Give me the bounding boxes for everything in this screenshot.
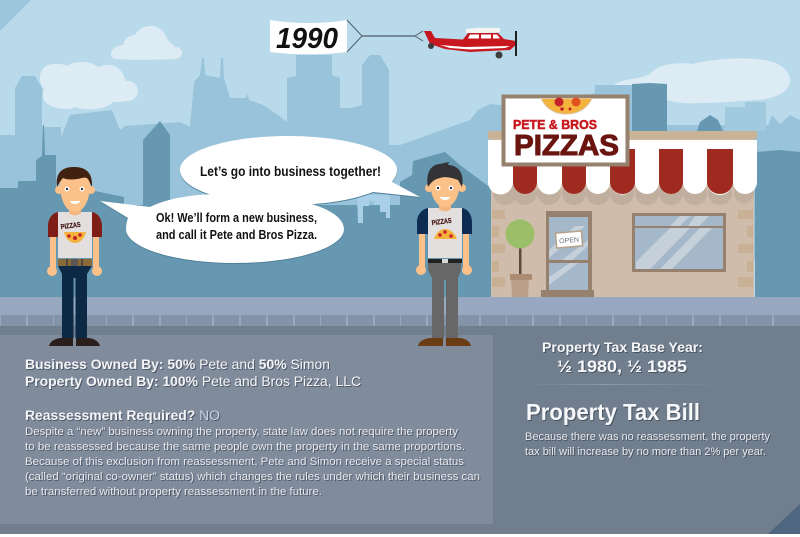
tax bill explanation: tax bill will increase by no more than 2% per year. <box>525 446 766 458</box>
pants <box>428 263 461 338</box>
bubble text <box>156 210 317 242</box>
eyes and smile <box>436 186 440 190</box>
sign pizza <box>541 98 592 114</box>
bubble text: Let’s go into business together! <box>200 163 381 179</box>
head <box>60 170 90 212</box>
dark skyline <box>0 83 800 300</box>
reassessment explanation: (called “original co-owner” status) which changes the rules under which their business can <box>25 471 480 483</box>
shirt logo: PIZZAS <box>60 222 81 231</box>
corner fold bottom right <box>768 504 800 534</box>
sleeves <box>417 208 472 234</box>
reassessment explanation <box>25 426 480 498</box>
open sign: OPEN <box>559 237 579 245</box>
shirt logo <box>60 222 86 243</box>
sidewalk <box>0 297 800 327</box>
awning <box>488 140 757 195</box>
shoes <box>49 338 100 346</box>
speech bubble: Pete <box>100 194 344 263</box>
speech bubble: Simon <box>180 136 420 205</box>
potted plant <box>506 220 534 297</box>
window <box>632 213 726 272</box>
arms <box>50 235 56 270</box>
shirt logo: PIZZAS <box>431 218 452 227</box>
tax bill explanation <box>525 431 770 458</box>
pants <box>58 266 92 338</box>
reassessment explanation: be transferred without property reassessment in the future. <box>25 486 322 498</box>
base year value: ½ 1980, ½ 1985 <box>557 357 687 376</box>
bubble text: Ok! We’ll form a new business, <box>156 210 317 225</box>
roof band <box>488 131 757 139</box>
awning shadow <box>493 181 754 205</box>
door <box>541 211 594 297</box>
propeller <box>515 31 517 56</box>
character: Simon <box>416 162 472 346</box>
shirt logo <box>431 218 457 239</box>
hair <box>57 167 92 187</box>
reassessment explanation: Because of this exclusion from reassessment, Pete and Simon receive a special status <box>25 456 464 468</box>
character: Pete <box>47 167 102 346</box>
shoes <box>418 338 471 346</box>
property tax text block <box>525 339 770 458</box>
business ownership: Business Owned By: 50% Pete and 50% Simon <box>25 357 330 372</box>
pizza sign: PIZZAS <box>514 130 619 162</box>
cabin roof <box>466 28 500 33</box>
sign text: PETE & BROS <box>513 117 597 132</box>
pizza shop <box>488 96 757 297</box>
corner fold top left <box>0 0 31 31</box>
light skyline <box>0 55 800 260</box>
year: 1990 <box>276 23 338 55</box>
base year label: Property Tax Base Year: <box>542 339 703 355</box>
property ownership: Property Owned By: 100% Pete and Bros Pizza, LLC <box>25 374 361 389</box>
shop wall <box>491 136 754 297</box>
tow line <box>347 20 423 52</box>
clouds <box>40 26 790 109</box>
pizza sign <box>504 96 628 164</box>
bubble text: and call it Pete and Bros Pizza. <box>156 227 317 242</box>
lower dark band <box>0 326 800 534</box>
head <box>430 166 460 207</box>
banner <box>270 20 347 54</box>
belt <box>58 259 92 266</box>
airplane with banner <box>270 20 517 58</box>
belt <box>428 259 462 263</box>
light window skyline behind bubbles <box>357 195 390 223</box>
plane body <box>424 31 517 52</box>
shirt <box>58 212 92 258</box>
wall bricks <box>492 210 753 287</box>
tax bill heading: Property Tax Bill <box>526 399 700 425</box>
hair <box>427 162 463 187</box>
reassessment explanation: Despite a “new” business owning the property, state law does not require the property <box>25 426 458 438</box>
ownership text block <box>25 357 480 498</box>
paving bricks <box>1 315 800 326</box>
wheels <box>428 43 434 49</box>
text panel background <box>0 335 493 524</box>
shirt <box>428 208 462 258</box>
arms <box>419 232 425 268</box>
tax bill explanation: Because there was no reassessment, the property <box>525 431 770 443</box>
sky background <box>0 0 800 300</box>
eyes and smile <box>64 186 70 192</box>
sleeves <box>48 212 102 237</box>
neck <box>439 201 451 211</box>
reassessment explanation: to be reassessed because the same people own the property in the same proportions. <box>25 441 465 453</box>
neck <box>69 205 81 215</box>
reassessment heading: Reassessment Required? NO <box>25 408 220 423</box>
